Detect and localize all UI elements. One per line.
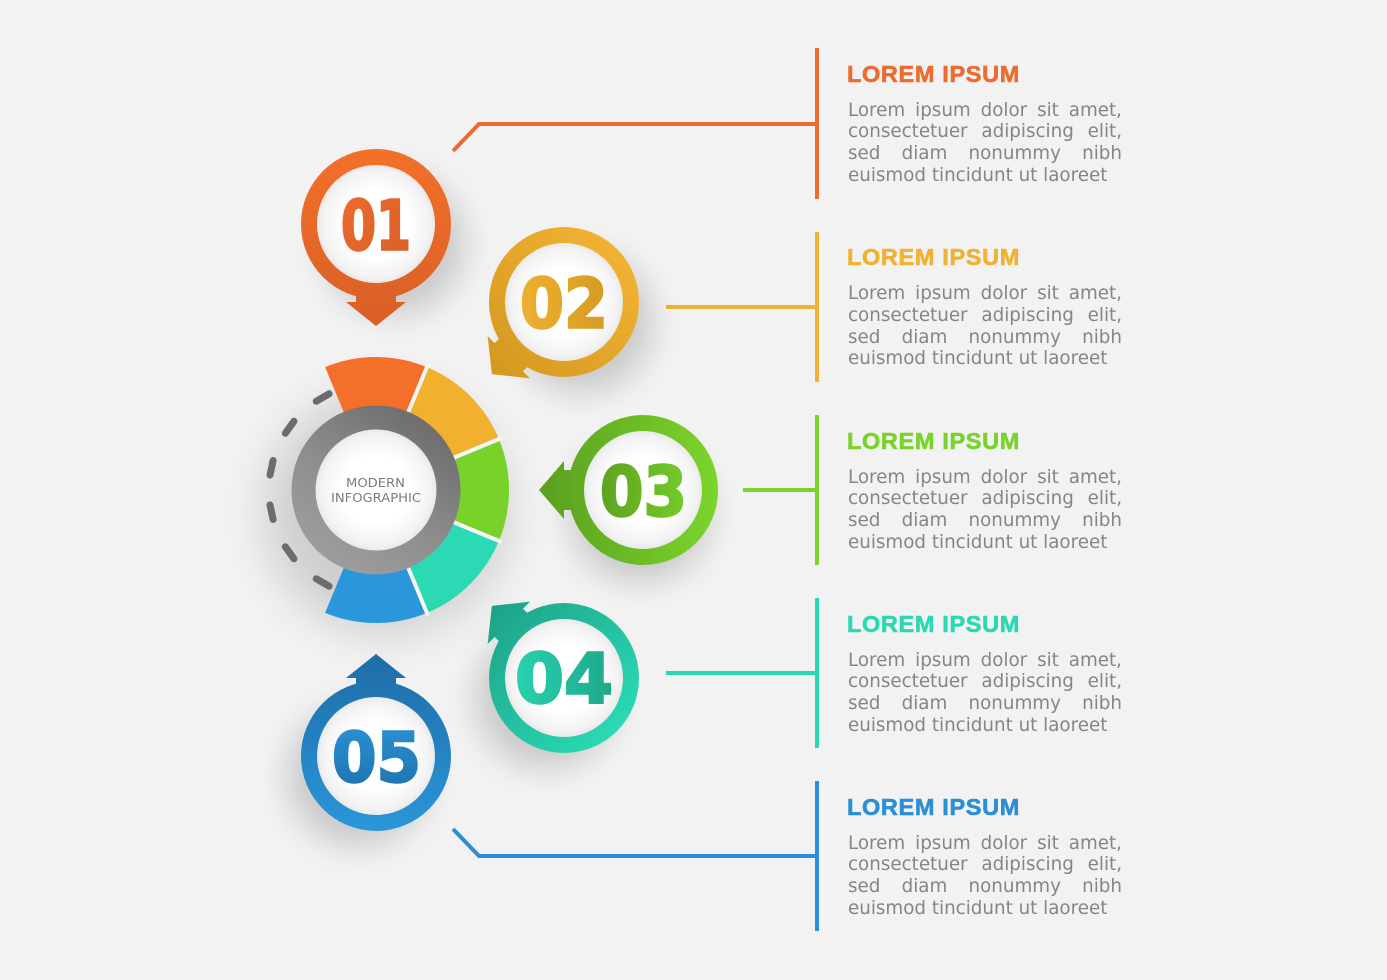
text block 01: sed diam nonummy nibh bbox=[848, 143, 1122, 164]
connector 01 bbox=[453, 124, 817, 151]
arrow and ring 04 bbox=[439, 553, 670, 784]
central wheel bbox=[264, 357, 509, 634]
number 01: 01 bbox=[341, 186, 411, 266]
segment: teal bbox=[407, 521, 499, 613]
text block 05: Lorem ipsum dolor sit amet, bbox=[848, 832, 1122, 854]
panel: item 01 bbox=[815, 48, 1122, 199]
segment: yellow bbox=[407, 367, 499, 459]
heading 01: LOREM IPSUM bbox=[847, 60, 1020, 86]
number 04: 04 bbox=[515, 640, 613, 720]
heading 03: LOREM IPSUM bbox=[847, 428, 1020, 454]
segment: green bbox=[450, 439, 509, 541]
dashed arc bbox=[270, 394, 329, 586]
badge 03 bbox=[539, 415, 718, 582]
arrow and ring 03 bbox=[539, 415, 718, 565]
text block 05: euismod tincidunt ut laoreet bbox=[848, 898, 1107, 919]
connector 02 bbox=[666, 305, 817, 309]
text block 04: consectetuer adipiscing elit, bbox=[848, 671, 1122, 692]
text block 01: Lorem ipsum dolor sit amet, bbox=[848, 100, 1122, 120]
badge 01 bbox=[301, 149, 464, 326]
center disc label: MODERN bbox=[346, 475, 405, 490]
number 05: 05 bbox=[332, 718, 421, 798]
text block 02: consectetuer adipiscing elit, bbox=[848, 305, 1122, 326]
text block 02: euismod tincidunt ut laoreet bbox=[848, 348, 1107, 369]
panel: item 02 bbox=[815, 232, 1122, 382]
text block 02: Lorem ipsum dolor sit amet, bbox=[848, 283, 1122, 304]
heading 04: LOREM IPSUM bbox=[847, 610, 1020, 636]
text block 03: Lorem ipsum dolor sit amet, bbox=[848, 466, 1122, 488]
text block 01: euismod tincidunt ut laoreet bbox=[848, 165, 1107, 186]
text block 03: sed diam nonummy nibh bbox=[848, 510, 1122, 531]
center disc label: INFOGRAPHIC bbox=[331, 490, 421, 505]
text block 03: euismod tincidunt ut laoreet bbox=[848, 532, 1107, 553]
number 02: 02 bbox=[520, 264, 608, 344]
number 03: 03 bbox=[600, 452, 687, 532]
gray ring bbox=[292, 406, 460, 574]
text block 01 bbox=[848, 100, 1122, 186]
text block 02 bbox=[848, 283, 1122, 369]
text block 04 bbox=[848, 650, 1122, 736]
arrow and ring 02 bbox=[439, 196, 670, 427]
badge 02 bbox=[439, 196, 670, 427]
text block 03: consectetuer adipiscing elit, bbox=[848, 488, 1122, 509]
panel: item 04 bbox=[815, 598, 1122, 748]
connector 03 bbox=[743, 488, 817, 492]
segment: orange bbox=[325, 357, 427, 416]
text block 04: sed diam nonummy nibh bbox=[848, 693, 1122, 714]
badge 04 bbox=[439, 553, 670, 784]
panel: item 03 bbox=[815, 415, 1122, 565]
text block 05: sed diam nonummy nibh bbox=[848, 876, 1122, 897]
text block 05 bbox=[848, 832, 1122, 919]
segment: blue bbox=[325, 564, 427, 623]
arrow and ring 05 bbox=[301, 654, 451, 831]
badge 05 bbox=[288, 654, 451, 846]
text block 02: sed diam nonummy nibh bbox=[848, 327, 1122, 348]
heading 05: LOREM IPSUM bbox=[847, 794, 1020, 820]
connector 04 bbox=[666, 671, 817, 675]
text block 03 bbox=[848, 466, 1122, 553]
text block 04: Lorem ipsum dolor sit amet, bbox=[848, 650, 1122, 670]
arrow and ring 01 bbox=[301, 149, 451, 326]
text block 05: consectetuer adipiscing elit, bbox=[848, 854, 1122, 875]
connector 05 bbox=[453, 829, 817, 856]
center disc label bbox=[316, 430, 436, 550]
text block 01: consectetuer adipiscing elit, bbox=[848, 121, 1122, 142]
panel: item 05 bbox=[815, 781, 1122, 931]
text block 04: euismod tincidunt ut laoreet bbox=[848, 715, 1107, 736]
heading 02: LOREM IPSUM bbox=[847, 244, 1020, 270]
